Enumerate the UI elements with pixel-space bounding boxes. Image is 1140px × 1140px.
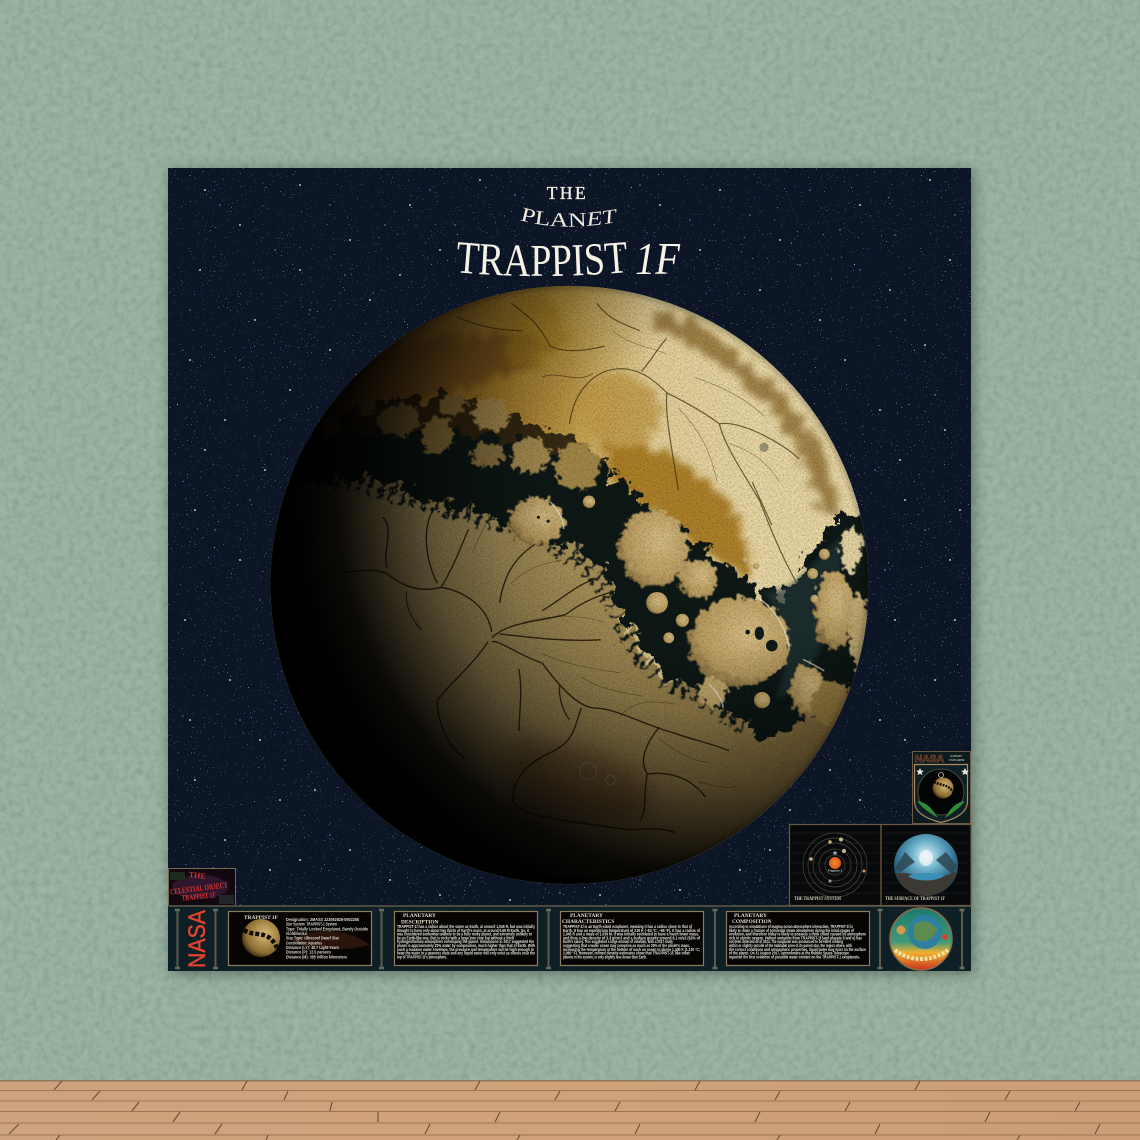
upper blob row bbox=[359, 385, 869, 727]
panel heading: CHARACTERISTICS bbox=[562, 919, 614, 925]
title line: TRAPPIST 1F: TRAPPIST bbox=[458, 242, 626, 276]
starfield background bbox=[168, 168, 971, 971]
terminator shadow bbox=[266, 276, 889, 899]
panel: planetary characteristics bbox=[560, 912, 704, 966]
dark ribbon bbox=[262, 430, 892, 757]
body text: increasing the temperature at the bottom of such an ocean to above 1,400 K (1,130 °C; bbox=[563, 947, 700, 952]
body text: planet is approximately 20% water by composition, much higher than that of Earth. With bbox=[397, 943, 535, 948]
dark fringe above the upper hills bbox=[340, 397, 605, 482]
body text: be an Earth-like one, that is rocky with a large iron core but without a thick bbox=[397, 935, 514, 940]
data list bbox=[286, 917, 368, 959]
panel: TRAPPIST 1F data bbox=[228, 912, 372, 966]
body text: the correct conditions and atmospheric properties, liquid water may exist on the surface bbox=[729, 947, 866, 952]
icon: badge planet bbox=[932, 772, 954, 798]
body text: not been detected as of 2024. The exoplanet was announced to be either orbiting bbox=[729, 939, 843, 944]
darker southern lowlands bbox=[508, 739, 655, 828]
body text bbox=[728, 924, 866, 959]
data list: Distance (M): 385 trillion kilometers bbox=[286, 954, 347, 959]
body text bbox=[563, 924, 700, 959]
body text: According to simulations of magma ocean-atmosphere interaction, TRAPPIST-1f is bbox=[729, 924, 853, 929]
title line: TRAPPIST 1F: 1F bbox=[635, 233, 681, 284]
body text: 1.045 R and a mass of 1.039 M. It was initially estimated to have a much lower mass, bbox=[563, 932, 699, 937]
orbit diagram: Trappist-1 bbox=[828, 868, 842, 872]
body text: rich in abiotic oxygen. Helium emission from TRAPPIST-1f (and planets b and e) has bbox=[729, 935, 862, 940]
title line: PLANET: PLANET bbox=[520, 208, 616, 227]
bottom information strip bbox=[168, 905, 971, 971]
body text: 2,060 °F). However, refined density estimates show that TRAPPIST-1f, like other bbox=[563, 951, 690, 956]
panel heading: PLANETARY bbox=[403, 913, 436, 919]
body text: evolution, and therefore today is likely to possess a thick cloud caused by atmosphere bbox=[729, 932, 866, 937]
small round islets bbox=[583, 496, 830, 708]
icon: laurel wreath bbox=[917, 801, 965, 818]
lower continent bbox=[262, 479, 892, 902]
data list: Constellation: Aquarius bbox=[286, 940, 322, 945]
teal tint in right ribbon bbox=[760, 537, 842, 700]
poster bbox=[162, 162, 982, 982]
crack network: lower bbox=[344, 510, 729, 832]
body text: of the planet. On 31 August 2017, astronomers at the Hubble Space Telescope bbox=[729, 951, 849, 956]
panel heading: TRAPPIST 1F bbox=[244, 915, 279, 921]
upper golden hemisphere bbox=[266, 276, 889, 899]
panel heading: COMPOSITION bbox=[732, 919, 772, 925]
celestial object label bbox=[168, 868, 236, 906]
craters on big island bbox=[537, 443, 778, 651]
panel caption: THE SURFACE OF TRAPPIST 1F bbox=[885, 897, 945, 902]
surface view disc bbox=[894, 834, 958, 896]
body text: and thus a low density of 3.3 g/cm3 and a surface gravity around 6.1 m/s2 (62% of bbox=[563, 935, 700, 940]
panel heading: DESCRIPTION bbox=[401, 920, 439, 926]
body text: Earth's value). This suggested a large amount of volatiles, with a 2017 study bbox=[563, 939, 673, 944]
mission badge bbox=[912, 752, 970, 824]
label heading line: THE bbox=[188, 870, 206, 881]
body text: keep the water in a gaseous state and any liquid water will only exist as clouds near the bbox=[397, 951, 535, 956]
panel caption: THE TRAPPIST SYSTEM bbox=[794, 897, 841, 902]
label name line: CELESTIAL OBJECT bbox=[170, 880, 229, 897]
planet bbox=[262, 276, 892, 902]
body text: reported the first evidence of possible water content on the TRAPPIST-1 exoplanets. bbox=[729, 954, 860, 959]
panel heading: PLANETARY bbox=[570, 913, 603, 919]
island blobs bbox=[509, 497, 564, 545]
panel heading bbox=[562, 913, 614, 925]
data list: Goldilocks bbox=[286, 931, 307, 936]
title line: THE: THE bbox=[547, 183, 588, 203]
badge shield bbox=[914, 764, 968, 822]
label object line: TRAPPIST 1F bbox=[181, 890, 216, 903]
badge caption: SUMMIT bbox=[950, 755, 962, 758]
fractal patches upper right bbox=[655, 319, 830, 513]
bright shoreline highlights bbox=[550, 502, 824, 708]
wooden floor bbox=[0, 1080, 1140, 1140]
surface grain bbox=[375, 286, 868, 825]
panel: planetary composition bbox=[726, 912, 870, 966]
body text: TRAPPIST-1f has a radius about the same as Earth, at around 1.045 R, but was initially bbox=[397, 924, 535, 929]
data list: Star Type: Ultracool Dwarf Star bbox=[286, 936, 339, 941]
body text: was considered somewhat unlikely to be a fully rocky planet, and extremely unlikely to bbox=[396, 932, 532, 937]
badge NASA wordmark: NASA bbox=[915, 753, 944, 765]
data list: Star System: TRAPPIST-1 System bbox=[286, 922, 337, 926]
badge caption: EXPLORER bbox=[949, 759, 966, 762]
icon: round earth emblem bbox=[890, 908, 952, 970]
data list: Distance (P): 12.5 parsecs bbox=[286, 950, 331, 955]
panel: planetary description bbox=[394, 912, 538, 966]
panel heading bbox=[732, 913, 772, 925]
icon: planet thumbnail bbox=[242, 919, 280, 957]
body text bbox=[396, 924, 535, 959]
body text: planets in the system, is only slightly less dense than Earth. bbox=[563, 954, 647, 959]
title bbox=[458, 183, 681, 284]
panel: the surface of Trappist 1F bbox=[881, 824, 971, 906]
body text: such a massive water envelope, the pressure and temperature will be high enough to bbox=[397, 947, 534, 952]
lower limb shading bbox=[434, 286, 868, 842]
badge caption bbox=[949, 755, 966, 762]
panel: the Trappist system bbox=[790, 824, 881, 906]
body text: hydrogen/helium atmosphere enveloping the planet. Simulations in 2017 suggested the bbox=[397, 939, 534, 944]
golden ochre ridge bbox=[601, 440, 749, 580]
panel heading: PLANETARY bbox=[734, 913, 767, 919]
data list: Type: Tidally Locked Exoplanet, Barely Outside bbox=[286, 926, 368, 931]
body text: Earth. It has an equilibrium temperature of 219 K (−54 °C; −65 °F). It has a radius of bbox=[563, 928, 700, 933]
NASA logo: NASA bbox=[184, 910, 211, 968]
body text: TRAPPIST-1f is an Earth-sized exoplanet, meaning it has a radius close to that of bbox=[563, 924, 692, 929]
panel heading bbox=[401, 913, 439, 926]
fern teeth along shoreline bbox=[336, 478, 750, 727]
badge star disc bbox=[918, 769, 964, 815]
body text: suggesting that a water ocean may comprise as much as 20% of the planet's mass, bbox=[563, 943, 690, 948]
body text: thought to have only about two thirds of Earth's mass, at around 0.68 M Earth. So, it bbox=[397, 928, 529, 933]
southern crater marks bbox=[477, 696, 615, 785]
brown upper-left highlands bbox=[408, 331, 546, 398]
body text: top of TRAPPIST-1f's atmosphere. bbox=[397, 954, 447, 959]
data list: Distance (LY): 40.7 Light-Years bbox=[286, 945, 339, 950]
fine branching veins bbox=[472, 331, 780, 787]
body text: within or slightly outside of the habitable zone of its parent star, the region where, with bbox=[728, 943, 852, 948]
body text: likely to retain a fraction of primordial steam atmosphere during the initial stages of bbox=[729, 928, 854, 933]
crack network: upper bbox=[457, 303, 799, 587]
data list: Designation: 2MASS J23062928-0502285 bbox=[286, 917, 359, 922]
